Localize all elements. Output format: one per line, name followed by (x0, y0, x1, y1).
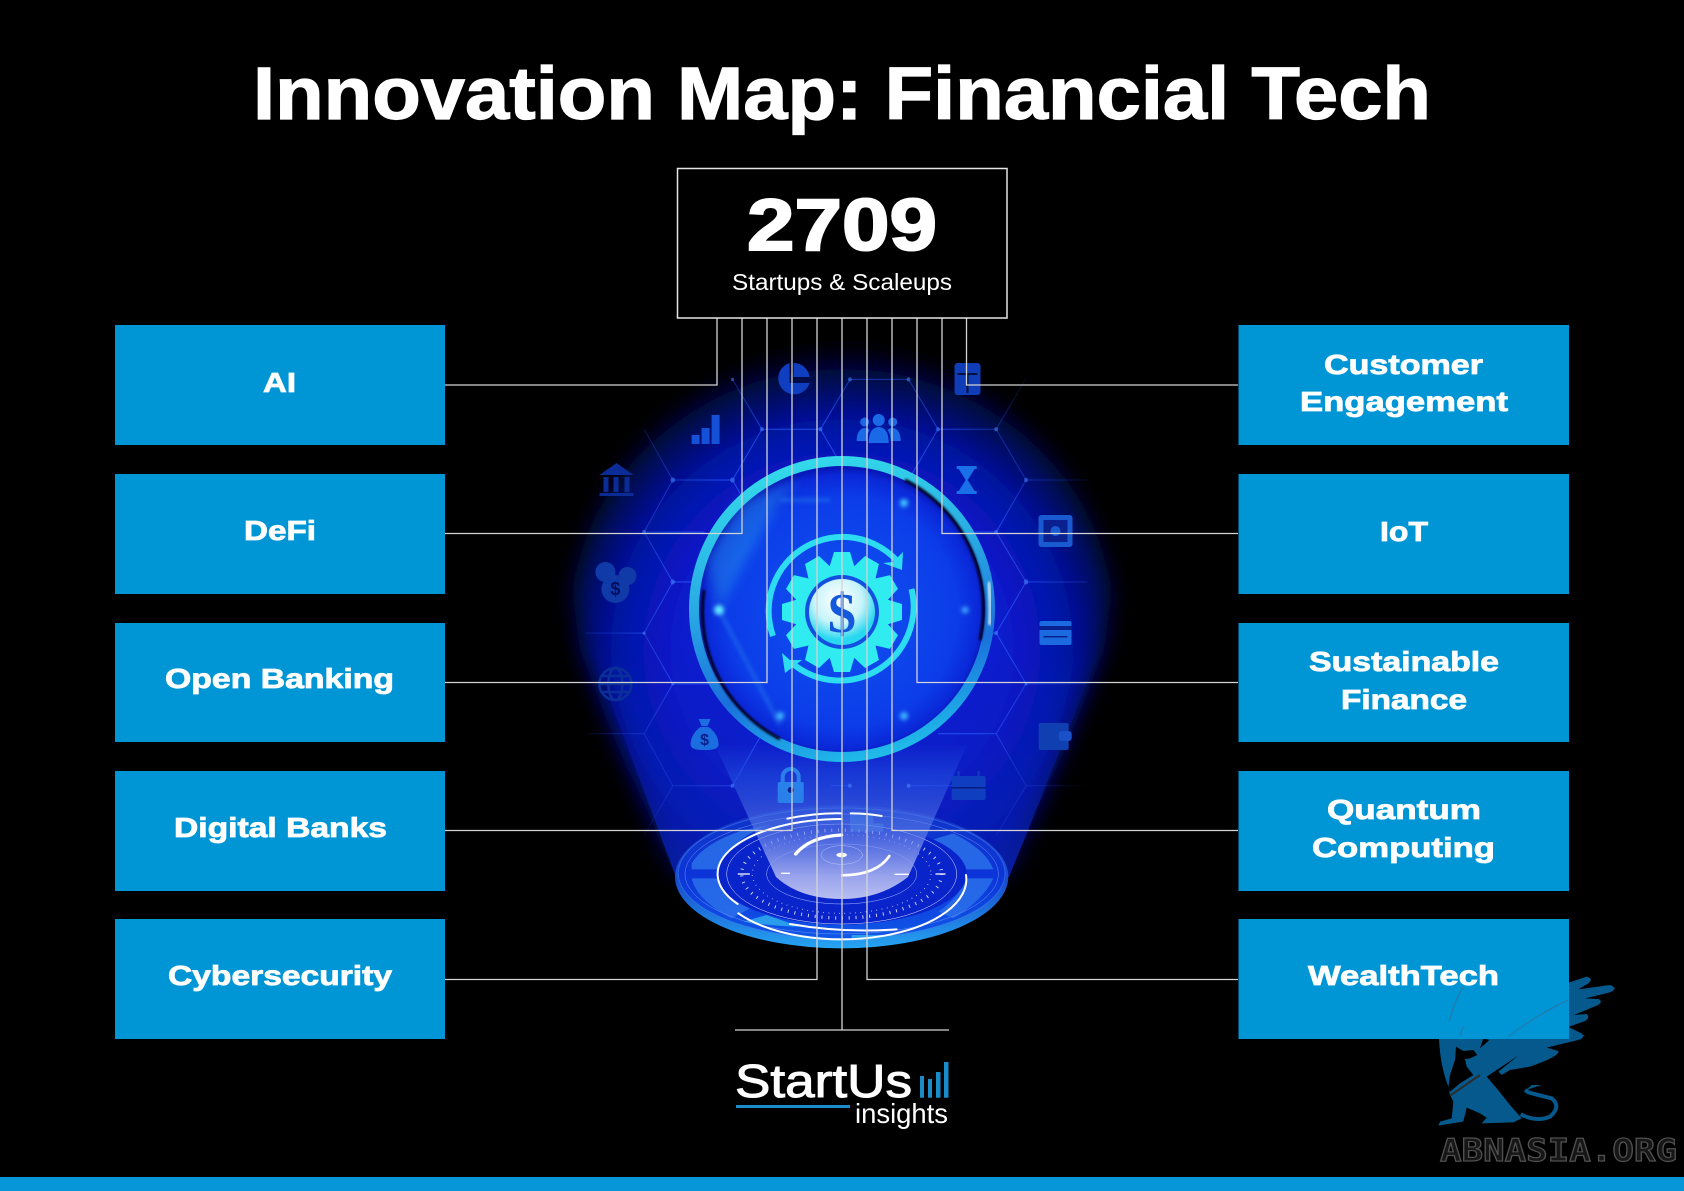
light beam (715, 745, 967, 899)
icon: pie chart (778, 363, 810, 394)
counter box (678, 168, 1007, 318)
icon: bank (600, 463, 634, 496)
connector lines (444, 318, 1238, 1030)
panel: left categories (115, 325, 445, 1039)
logo: StartUs insights: StartUs (735, 1055, 912, 1107)
griffin wing overlay on box (1449, 987, 1568, 1037)
rim shadows and highlight (905, 480, 984, 640)
box: Sustainable Finance: Sustainable (1309, 646, 1499, 677)
box: Quantum Computing: Quantum (1327, 794, 1481, 825)
box: Cybersecurity: Cybersecurity (168, 960, 393, 991)
icon: coins (595, 562, 636, 603)
griffin watermark (1438, 977, 1615, 1126)
griffin feathers (1567, 977, 1615, 1042)
icon: coins: $ (610, 579, 620, 599)
icon: hourglass (957, 466, 977, 494)
box: Quantum Computing: Computing (1312, 832, 1495, 863)
box: Quantum Computing (1238, 771, 1569, 891)
box: WealthTech (1238, 919, 1569, 1039)
box: AI: AI (263, 367, 296, 398)
box: DeFi: DeFi (244, 515, 316, 546)
logo: StartUs insights (735, 1055, 948, 1129)
icon: bar chart (692, 415, 720, 444)
box: Sustainable Finance: Finance (1341, 684, 1467, 715)
disc panels (692, 825, 993, 918)
circular arrows (769, 537, 899, 636)
griffin body (1438, 1035, 1585, 1126)
icon: money bag: $ (700, 732, 709, 749)
box: Digital Banks (115, 771, 445, 891)
dollar sign: $ (828, 583, 856, 645)
box: Digital Banks: Digital Banks (174, 812, 387, 843)
counter caption: Startups & Scaleups (732, 269, 952, 295)
blue glow (572, 350, 1112, 877)
gear (782, 552, 902, 672)
box: Customer Engagement: Engagement (1300, 386, 1508, 417)
icon: globe (599, 668, 631, 700)
holographic base disc (675, 805, 1008, 948)
watermark text: ABNASIA.ORG (1440, 1133, 1677, 1169)
icon: padlock (778, 769, 804, 803)
box: AI (115, 325, 445, 445)
hexagon nodes (642, 377, 1028, 788)
icon: people (857, 414, 901, 443)
icon: safe (1038, 515, 1072, 547)
panel: right categories (1238, 325, 1569, 1039)
disc white arcs (718, 813, 966, 939)
box: WealthTech: WealthTech (1308, 960, 1499, 991)
icon: credit card (1040, 621, 1072, 645)
icon: calculator (954, 363, 980, 395)
faint screen blocks (850, 813, 883, 832)
box: IoT: IoT (1380, 516, 1428, 547)
icon: gear with dollar and arrows (769, 537, 914, 681)
box: Sustainable Finance (1238, 623, 1569, 742)
box: Cybersecurity (115, 919, 445, 1039)
bottom bar (0, 1177, 1684, 1191)
icon: briefcase (952, 771, 986, 800)
box: DeFi (115, 474, 445, 594)
title: Innovation Map: Financial Tech (253, 52, 1431, 135)
icon: wallet (1039, 723, 1072, 750)
central illustration: holographic fintech sphere (572, 350, 1112, 948)
hexagon grid (586, 377, 1087, 836)
box: Customer Engagement: Customer (1324, 349, 1483, 380)
box: Customer Engagement (1238, 325, 1569, 445)
box: IoT (1238, 474, 1569, 594)
funnel of light (590, 647, 1102, 877)
logo: StartUs insights: insights (855, 1098, 948, 1129)
box: Open Banking: Open Banking (165, 663, 394, 694)
box: Open Banking (115, 623, 445, 742)
sphere (694, 462, 991, 756)
icon: money bag (691, 719, 719, 750)
sphere light details (706, 480, 800, 610)
startup count: 2709 (747, 185, 937, 266)
logo bars (920, 1062, 948, 1098)
